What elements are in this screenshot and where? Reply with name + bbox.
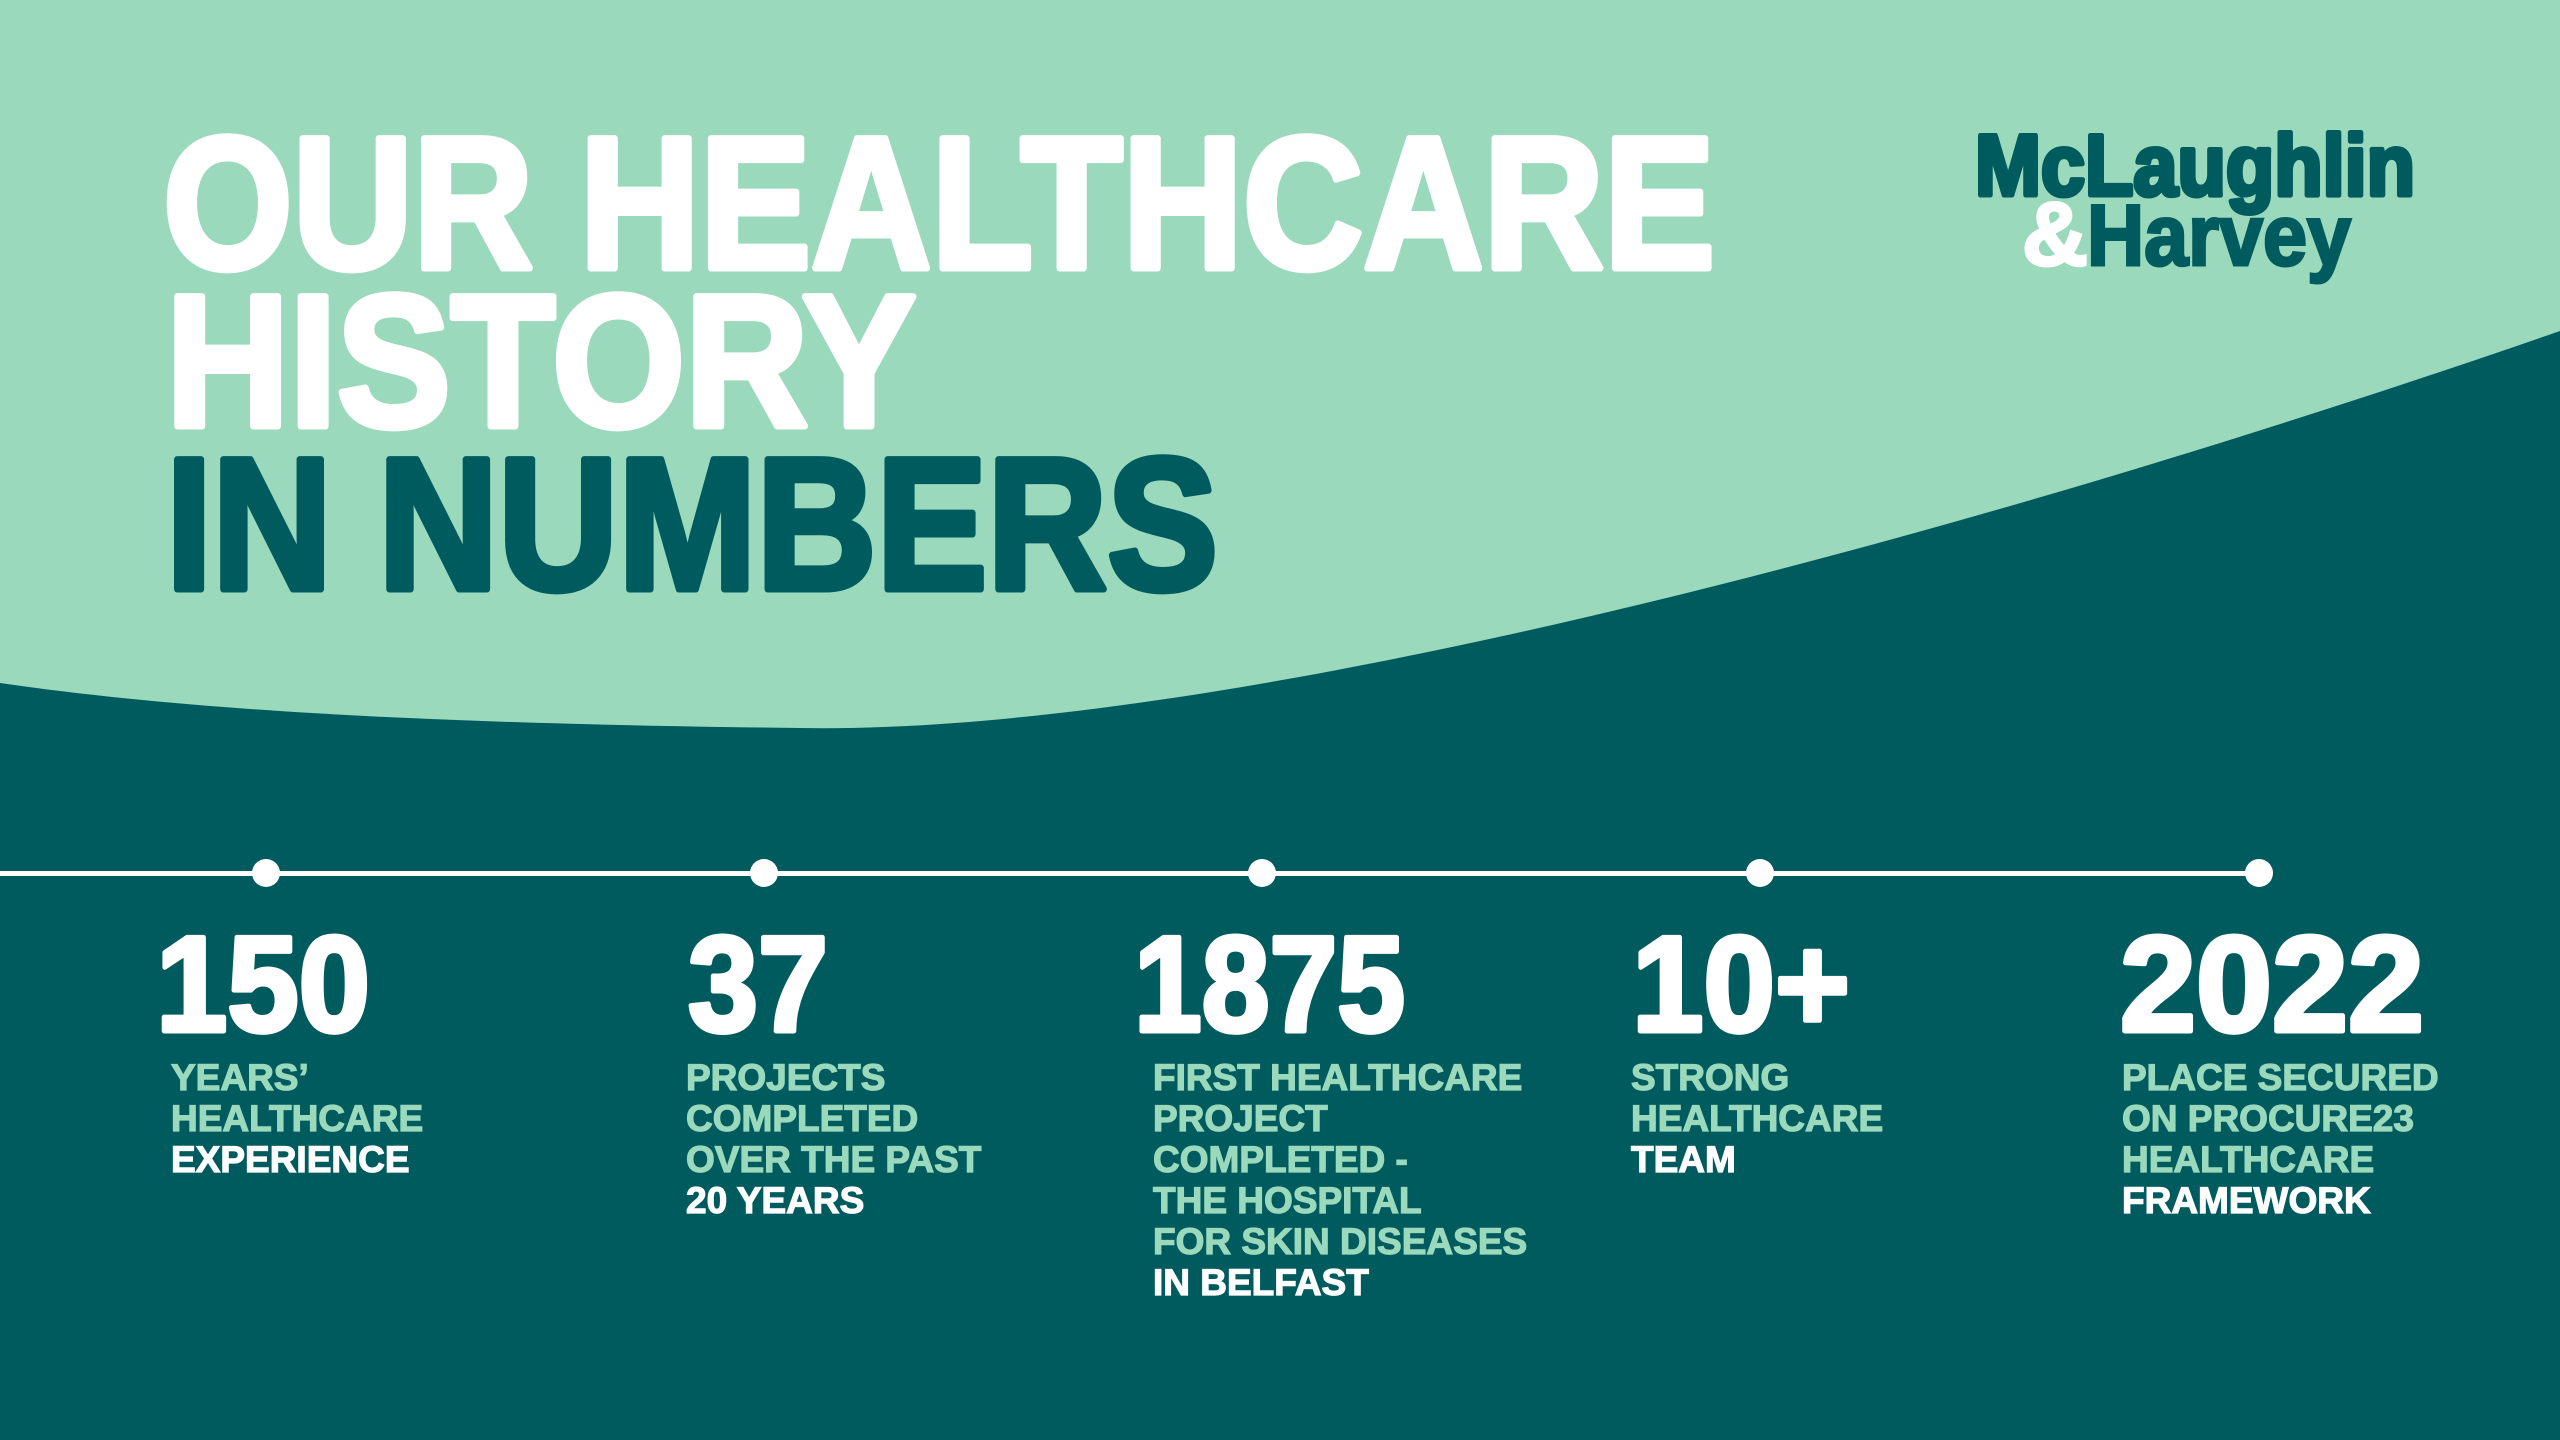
stat: 1875: COMPLETED - xyxy=(1153,1139,1408,1180)
stat: 150: EXPERIENCE xyxy=(171,1139,410,1180)
stat: 150 xyxy=(156,908,423,1180)
stat: 37: 37 xyxy=(688,908,828,1060)
stat: 37: COMPLETED xyxy=(686,1098,918,1139)
stat: 10+: TEAM xyxy=(1631,1139,1736,1180)
stat: 1875: PROJECT xyxy=(1153,1098,1328,1139)
title: OUR HEALTHCARE xyxy=(163,98,1715,308)
stat: 10+: HEALTHCARE xyxy=(1631,1098,1883,1139)
title: IN NUMBERS xyxy=(166,419,1218,629)
stat: 150: 150 xyxy=(156,908,370,1060)
stat: 1875: FOR SKIN DISEASES xyxy=(1153,1221,1527,1262)
stat: 37: 20 YEARS xyxy=(686,1180,864,1221)
stat: 10+ xyxy=(1631,908,1883,1180)
stat: 150: HEALTHCARE xyxy=(171,1098,423,1139)
title xyxy=(163,98,1715,629)
logo: McLaughlin & Harvey: & xyxy=(2022,185,2088,285)
stat: 150: YEARS’ xyxy=(171,1057,309,1098)
logo: McLaughlin & Harvey: Harvey xyxy=(2087,188,2351,284)
stat: 1875: FIRST HEALTHCARE xyxy=(1153,1057,1522,1098)
stat: 1875: THE HOSPITAL xyxy=(1153,1180,1422,1221)
logo: McLaughlin & Harvey: McLaughlin xyxy=(1975,118,2415,214)
timeline xyxy=(0,859,2273,887)
stat: 1875: IN BELFAST xyxy=(1153,1262,1369,1303)
title: HISTORY xyxy=(166,256,916,466)
stat: 37 xyxy=(686,908,982,1221)
stat: 37: OVER THE PAST xyxy=(686,1139,982,1180)
stat: 2022: FRAMEWORK xyxy=(2122,1180,2371,1221)
stat: 2022 xyxy=(2120,908,2439,1221)
stat: 10+: 10+ xyxy=(1632,908,1850,1060)
stat: 10+: STRONG xyxy=(1631,1057,1789,1098)
stat: 1875 xyxy=(1134,908,1527,1303)
stat: 2022: 2022 xyxy=(2120,908,2424,1060)
stat: 37: PROJECTS xyxy=(686,1057,885,1098)
stat: 1875: 1875 xyxy=(1134,908,1405,1060)
background: mint curved top area xyxy=(0,0,2560,728)
stat: 2022: PLACE SECURED xyxy=(2122,1057,2439,1098)
logo: McLaughlin & Harvey xyxy=(1975,118,2415,285)
stat: 2022: ON PROCURE23 xyxy=(2122,1098,2414,1139)
stat: 2022: HEALTHCARE xyxy=(2122,1139,2374,1180)
